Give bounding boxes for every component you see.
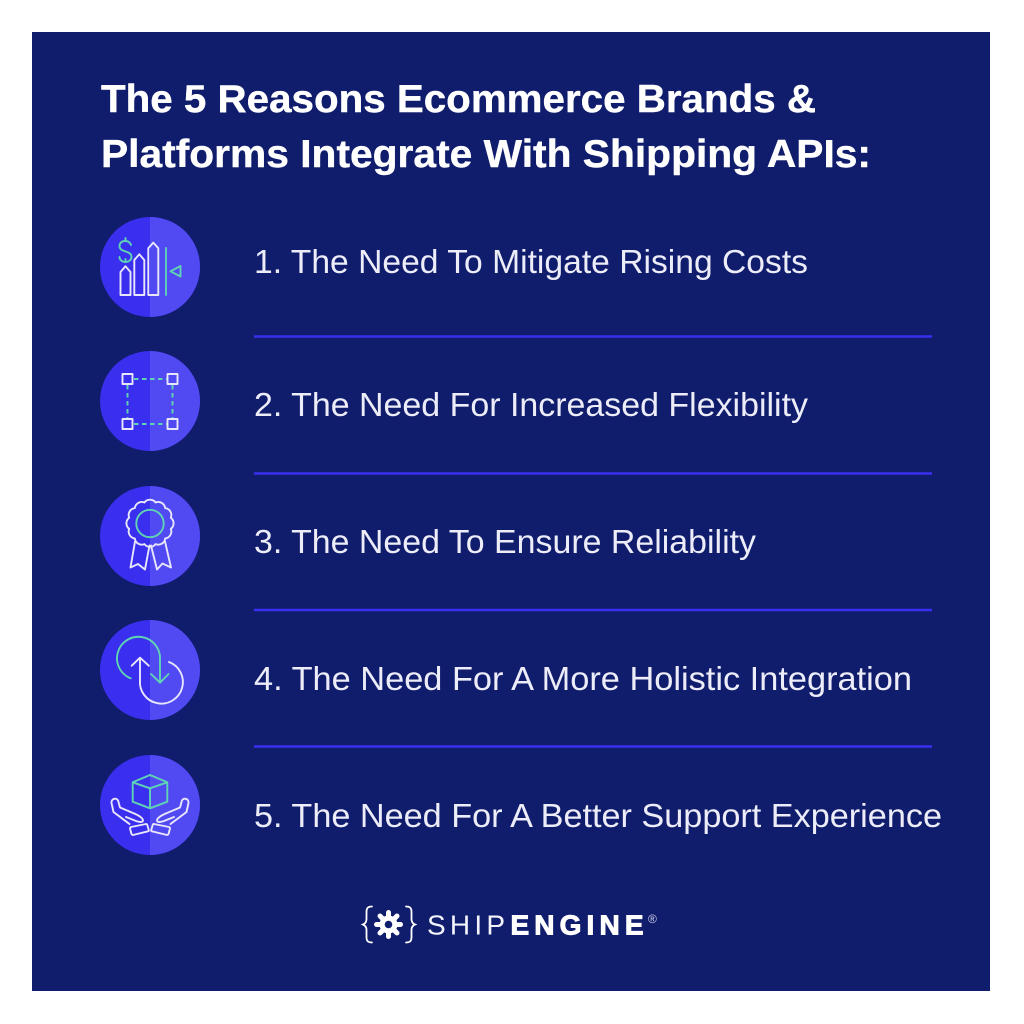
icon: hands holding box [100,755,200,855]
icon: award ribbon [100,486,200,586]
title: Platforms Integrate With Shipping APIs: [101,133,871,176]
item 3 text: 3. The Need To Ensure Reliability [254,523,757,560]
item 4 text: 4. The Need For A More Holistic Integration [254,660,912,697]
item 1 text: 1. The Need To Mitigate Rising Costs [254,243,808,280]
logo wordmark [427,910,644,940]
logo wordmark: ENGINE [510,910,644,940]
divider lines [254,336,932,746]
item 5 text: 5. The Need For A Better Support Experience [254,797,942,834]
icon: rising cost chart [100,217,200,317]
title: The 5 Reasons Ecommerce Brands & [101,78,816,121]
registered mark: ® [648,912,657,926]
logo: ShipEngine [363,906,657,942]
logo bracket and gear mark [363,906,415,942]
title [101,78,871,176]
item 2 text: 2. The Need For Increased Flexibility [254,386,809,423]
icon: integration arrows [100,620,200,720]
logo wordmark: SHIP [427,910,505,940]
icon: flexible resize frame [100,351,200,451]
